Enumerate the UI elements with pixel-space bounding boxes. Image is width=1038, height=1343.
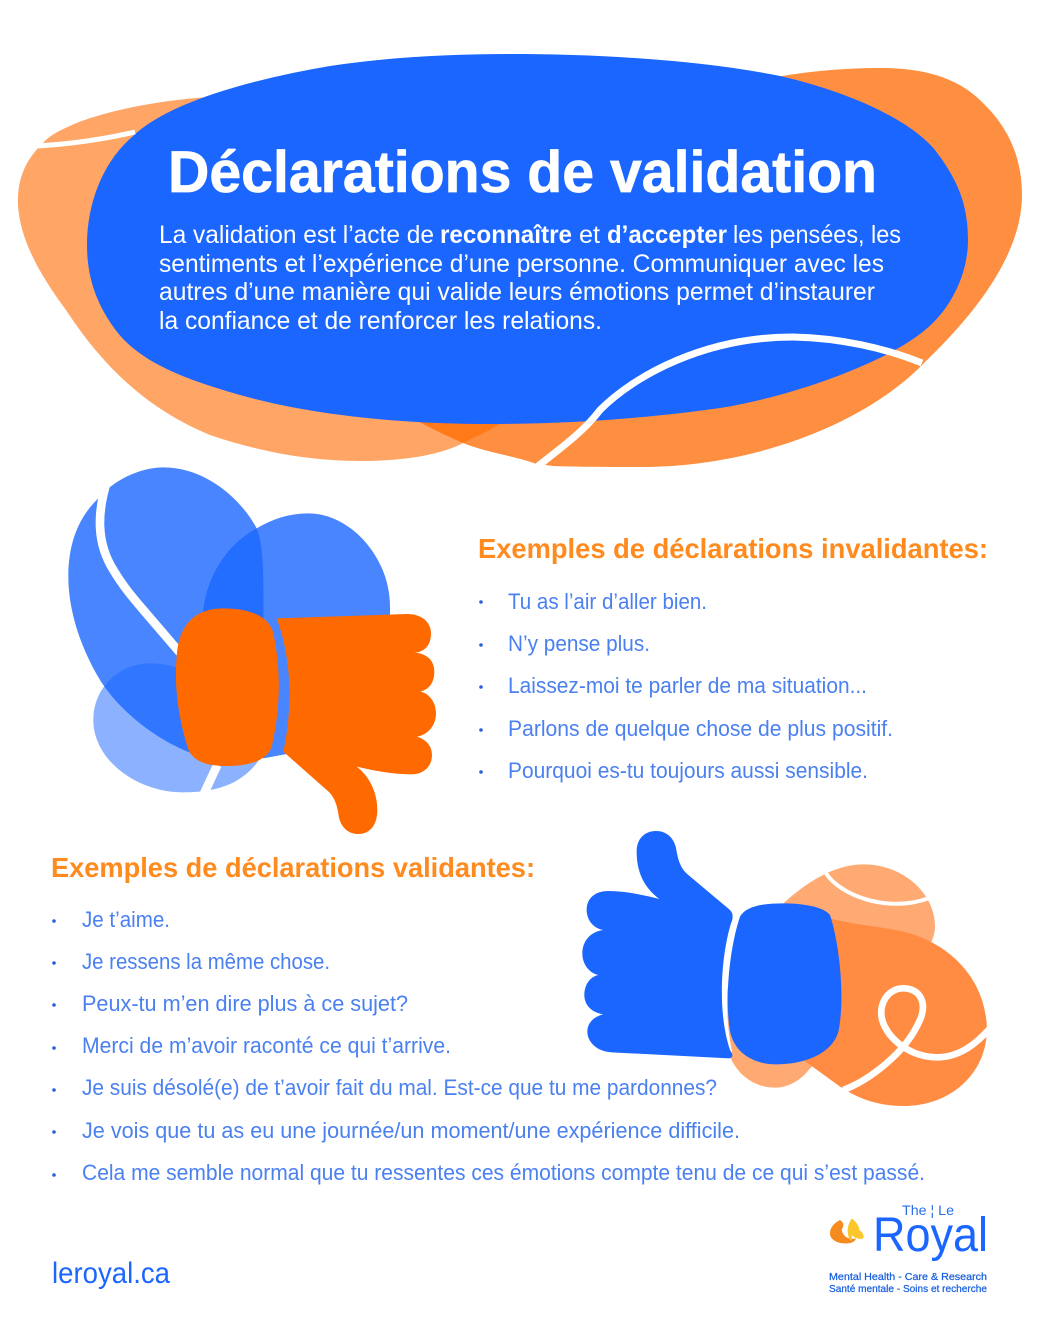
list: validating statements: Je ressens la même chose. xyxy=(82,949,330,974)
list: validating statements: Peux-tu m’en dire plus à ce sujet? xyxy=(82,991,408,1016)
list: validating statements: Je t’aime. xyxy=(82,907,170,932)
intro text: d’accepter xyxy=(607,221,727,249)
intro text: La validation est l’acte de xyxy=(159,221,434,249)
website url: leroyal.ca xyxy=(52,1257,170,1290)
blob: blue main xyxy=(87,54,968,424)
intro text: la confiance et de renforcer les relations. xyxy=(159,307,602,335)
blob: dark orange right xyxy=(416,68,1022,467)
heading: invalidating statements: Exemples de déclarations invalidantes: xyxy=(478,533,988,564)
cuff outline gap xyxy=(725,912,740,1053)
blob: blue large left xyxy=(68,467,263,760)
intro text: sentiments et l’expérience d’une personne. Communiquer avec les xyxy=(159,250,884,278)
list: invalidating statements: Tu as l’air d’aller bien. xyxy=(508,589,707,614)
cuff: blue xyxy=(728,903,841,1064)
blob: light orange xyxy=(723,864,935,1088)
list: validating statements: Cela me semble normal que tu ressentes ces émotions compte tenu de ce qui s’est passé. xyxy=(82,1160,925,1185)
list: invalidating statements: Pourquoi es-tu toujours aussi sensible. xyxy=(508,758,868,783)
blob: light orange left xyxy=(18,96,520,461)
intro text: autres d’une manière qui valide leurs émotions permet d’instaurer xyxy=(159,278,875,306)
panel: header blobs and intro xyxy=(18,54,1022,467)
list: invalidating statements: Parlons de quelque chose de plus positif. xyxy=(508,716,893,741)
logo butterfly orange xyxy=(830,1220,856,1243)
blob: pale blue lower xyxy=(93,663,263,792)
logo: The Royal xyxy=(829,1203,988,1295)
list: validating statements: Merci de m’avoir raconté ce qui t’arrive. xyxy=(82,1033,451,1058)
logo tagline french: Santé mentale - Soins et recherche xyxy=(829,1283,987,1295)
intro text: et xyxy=(579,221,600,249)
curve: white lower right xyxy=(538,337,922,466)
list: validating statements: Je suis désolé(e) de t’avoir fait du mal. Est-ce que tu me pardonnes? xyxy=(82,1075,717,1100)
logo the le: The ¦ Le xyxy=(902,1203,954,1218)
curve: white top left xyxy=(38,132,135,146)
intro text xyxy=(159,221,901,335)
list: invalidating statements: Laissez-moi te parler de ma situation... xyxy=(508,673,867,698)
curve: white arc xyxy=(826,873,928,904)
intro text: reconnaître xyxy=(440,221,572,249)
title: Déclarations de validation xyxy=(168,140,877,205)
list: invalidating statements: N’y pense plus. xyxy=(508,631,650,656)
hand: orange xyxy=(277,614,436,834)
hand: blue xyxy=(582,831,733,1058)
blob: dark orange xyxy=(770,918,987,1106)
curve: white loop xyxy=(843,988,990,1090)
cuff: orange xyxy=(176,608,279,766)
blob: blue right xyxy=(203,513,390,758)
list: invalidating statements xyxy=(479,589,893,783)
list: validating statements xyxy=(52,907,925,1185)
list: validating statements: Je vois que tu as eu une journée/un moment/une expérience difficile. xyxy=(82,1118,740,1143)
logo butterfly yellow xyxy=(848,1218,864,1241)
icon: thumbs up with orange blobs xyxy=(582,831,990,1106)
logo tagline english: Mental Health - Care & Research xyxy=(829,1271,987,1283)
icon: thumbs down with blue blobs xyxy=(68,467,436,834)
logo royal: Royal xyxy=(873,1209,988,1262)
intro text: les pensées, les xyxy=(733,221,901,249)
heading: validating statements: Exemples de déclarations validantes: xyxy=(51,852,535,883)
curve: white ribbon xyxy=(100,480,217,795)
